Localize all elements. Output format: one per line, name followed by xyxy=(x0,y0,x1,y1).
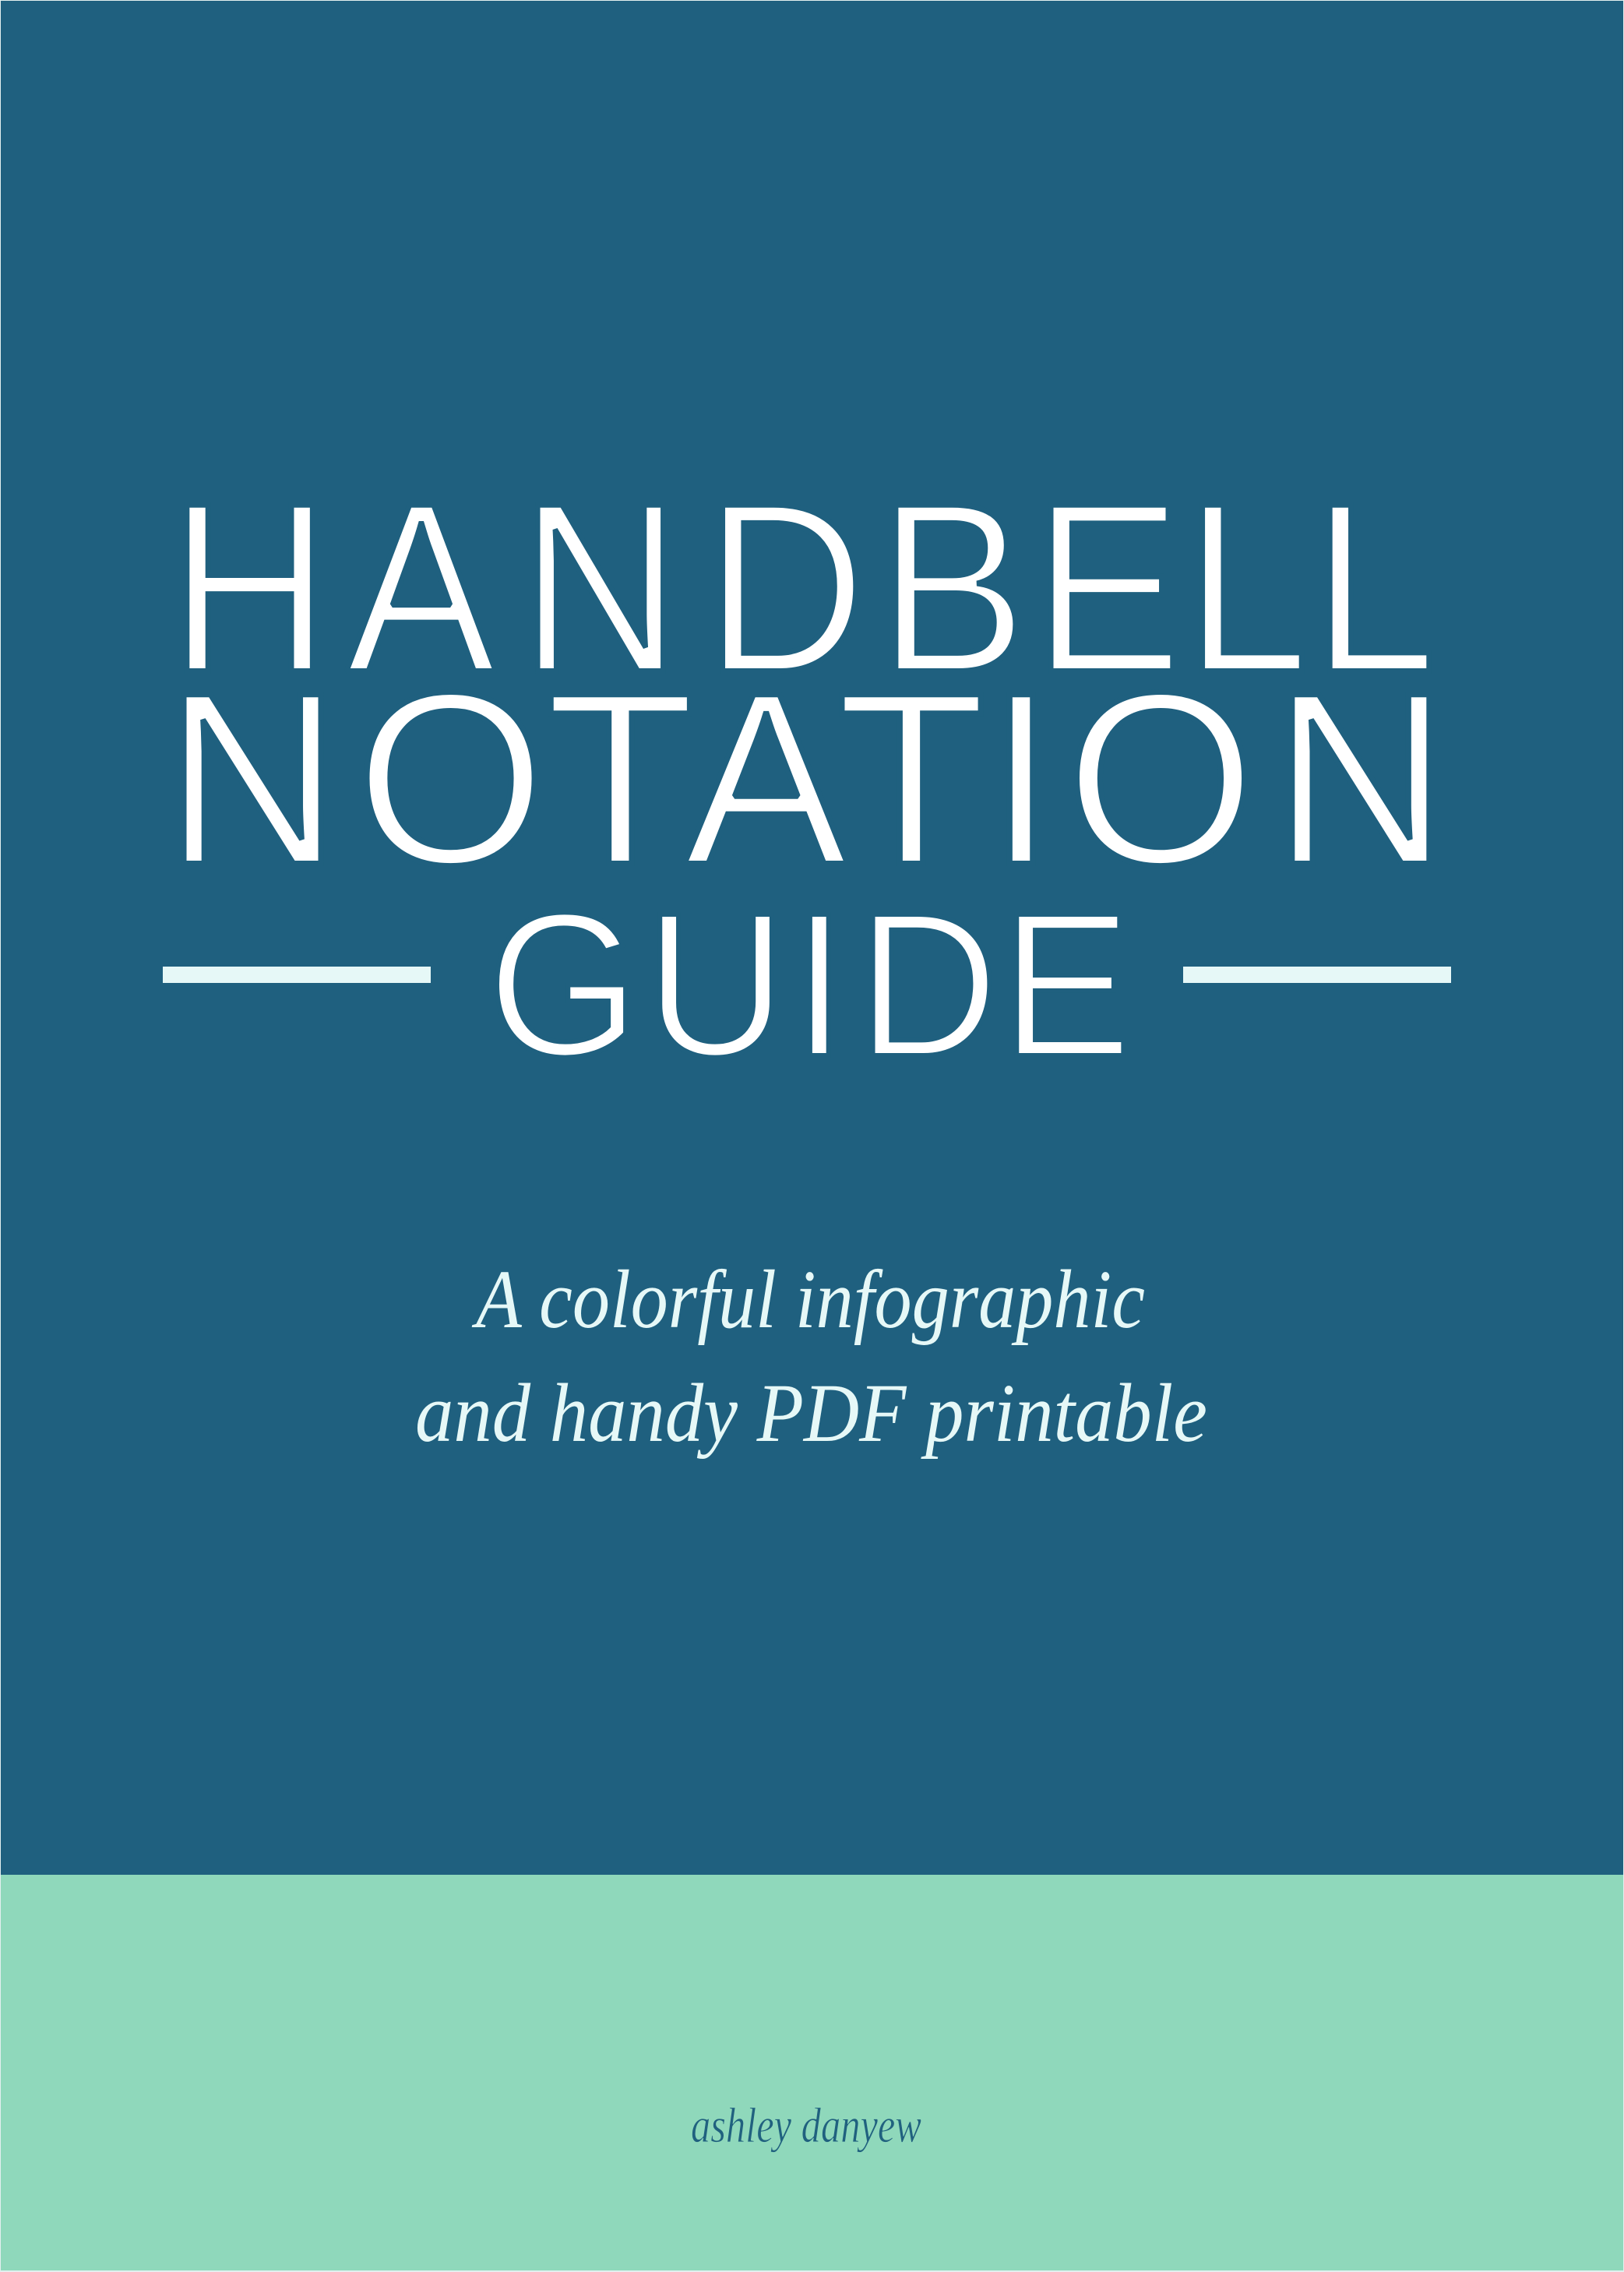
panel: mint footer band xyxy=(1,1875,1623,2270)
subtitle line two: and handy PDF printable xyxy=(415,1368,1207,1460)
title: Handbell Notation Guide xyxy=(164,453,1449,1099)
subtitle line one: A colorful infographic xyxy=(472,1254,1145,1346)
signature: author name: ashley danyew xyxy=(691,2098,921,2153)
divider: right rule beside GUIDE xyxy=(1183,967,1451,983)
heading line: HANDBELL: HANDBELL xyxy=(168,453,1436,723)
subtitle text block xyxy=(415,1254,1207,1460)
heading line: GUIDE: GUIDE xyxy=(487,870,1132,1099)
heading line: NOTATION: NOTATION xyxy=(164,642,1449,916)
divider: left rule beside GUIDE xyxy=(163,967,431,983)
